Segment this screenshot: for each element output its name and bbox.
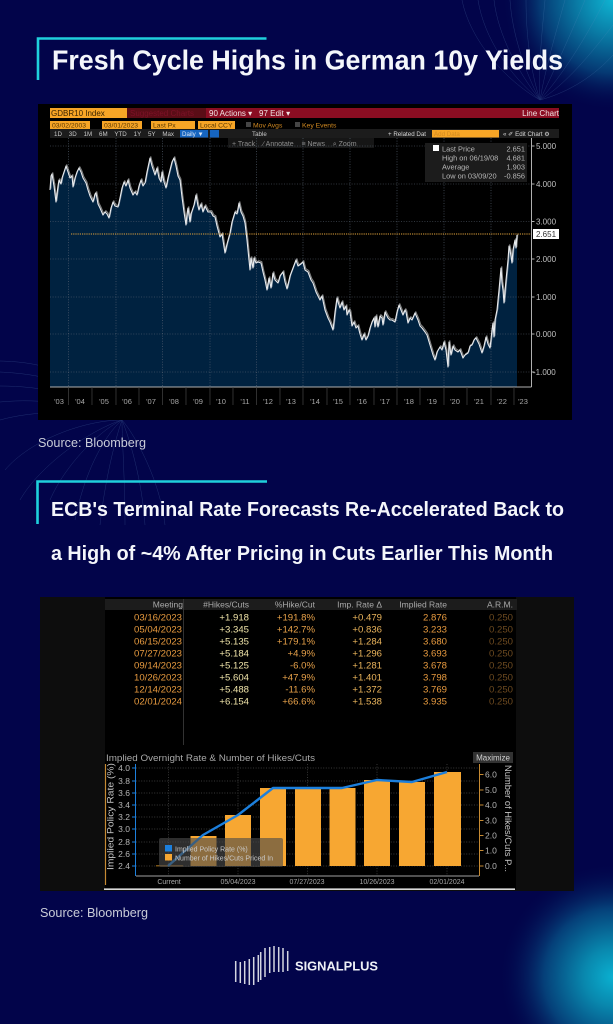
table: implied rates by meeting: 06/15/2023 (134, 636, 182, 648)
table: implied rates by meeting: 0.250 (489, 624, 513, 636)
legend: price statistics: High on 06/19/08 (442, 154, 498, 162)
title: ECB terminal rate: a High of ~4% After Pricing in Cuts Earlier This Month (51, 543, 553, 565)
table: implied rates by meeting: 3.798 (423, 672, 447, 684)
legend: price statistics (425, 143, 527, 182)
toolbar: chart header: Line Chart (522, 109, 560, 118)
legend: price statistics: 2.651 (506, 144, 525, 154)
table: implied rates by meeting: +1.296 (352, 648, 382, 660)
source note 2: Source: Bloomberg (40, 906, 148, 920)
toolbar: chart header: 97 Edit ▾ (259, 109, 290, 118)
table: implied rates by meeting: 3.233 (423, 624, 447, 636)
table: implied rates by meeting: +191.8% (277, 612, 315, 624)
axis: years: '20 (450, 397, 460, 406)
legend: price statistics: 4.681 (506, 154, 525, 162)
table: implied rates by meeting: 0.250 (489, 636, 513, 648)
axis: yield values: 2.651 (536, 230, 557, 239)
axis: number of hikes and cuts: 3.0 (485, 816, 497, 826)
axis: years: '16 (357, 397, 367, 406)
icon: signal wave bars (236, 946, 288, 985)
toolbar: chart header: Table (252, 131, 267, 138)
table: implied rates by meeting: +5.604 (219, 672, 250, 684)
axis: yield values: -1.000 (533, 368, 556, 377)
axis: years: '15 (333, 397, 343, 406)
axis: years: '06 (122, 397, 132, 406)
table: implied rates by meeting: 09/14/2023 (134, 660, 182, 672)
table: implied rates by meeting: +4.9% (288, 648, 315, 660)
axis: years: '05 (99, 397, 109, 406)
axis: years: '03 (54, 397, 64, 406)
table: implied rates by meeting: %Hike/Cut (275, 600, 316, 610)
toolbar: chart header: 03/01/2023 (104, 122, 138, 130)
table: implied rates by meeting: +1.918 (219, 612, 249, 624)
table: implied rates by meeting: -6.0% (290, 660, 315, 672)
legend: price statistics: Average (442, 162, 469, 172)
axis: number of hikes and cuts: 6.0 (485, 770, 497, 780)
toolbar: chart header: 1D 3D 1M 6M YTD 1Y 5Y Max (54, 131, 175, 138)
axis: years: '14 (310, 397, 320, 406)
table: implied rates by meeting: +1.372 (352, 684, 382, 696)
axis: years: '22 (497, 397, 507, 406)
axis: yield values: 1.000 (536, 293, 557, 302)
table: implied rates by meeting: 3.935 (423, 696, 447, 708)
toolbar: chart header: Add Data (434, 131, 460, 138)
table: implied rates by meeting: Meeting (153, 600, 183, 610)
table: implied rates by meeting: 12/14/2023 (134, 684, 182, 696)
table: implied rates by meeting: 02/01/2024 (134, 696, 183, 708)
toolbar: chart header: GDBR10 Index (51, 109, 105, 118)
table: implied rates by meeting: 3.678 (423, 660, 447, 672)
axis: years (54, 387, 528, 406)
logo: SignalPlus: SIGNALPLUS (295, 958, 378, 974)
toolbar: chart header: Mov Avgs (253, 122, 283, 130)
toolbar: chart header: 03/02/2003 (52, 122, 86, 130)
axis: years: '07 (146, 397, 156, 406)
table: implied rates by meeting: +179.1% (277, 636, 315, 648)
toolbar: chart header: + Track ∕ Annotate ≡ News ⌕ Zoom (232, 141, 357, 148)
title: ECB terminal rate: ECB's Terminal Rate Forecasts Re-Accelerated Back to (51, 499, 564, 521)
chart: plot area with yield line (50, 138, 531, 387)
axis: yield values: 3.000 (536, 218, 557, 226)
table: implied rates by meeting: 0.250 (489, 696, 513, 708)
table: implied rates by meeting: +0.836 (352, 624, 382, 636)
table: implied rates by meeting: -11.6% (285, 684, 315, 696)
legend: chart series: Number of Hikes/Cuts Priced In (175, 856, 273, 862)
table: implied rates by meeting: +6.154 (219, 696, 250, 708)
table: implied rates by meeting: #Hikes/Cuts (203, 600, 249, 610)
legend: price statistics: 1.903 (506, 162, 525, 172)
table: implied rates by meeting: +1.401 (352, 672, 382, 684)
axis: number of hikes and cuts: 2.0 (485, 830, 497, 840)
heading: implied overnight rate chart: Implied Overnight Rate & Number of Hikes/Cuts (106, 753, 315, 764)
axis: number of hikes and cuts (480, 764, 513, 876)
axis: years: '04 (75, 397, 85, 406)
table: implied rates by meeting: Implied Rate (399, 600, 447, 610)
table: implied rates by meeting: +5.125 (219, 660, 249, 672)
toolbar: chart header: Local CCY (200, 122, 233, 130)
axis: meeting dates: 07/27/2023 (289, 879, 325, 886)
table: implied rates by meeting: 2.876 (423, 612, 447, 624)
legend: chart series: Implied Policy Rate (%) (175, 846, 248, 854)
axis: meeting dates: Current (157, 879, 181, 886)
axis: years: '23 (518, 397, 528, 406)
axis: implied policy rate: 3.6 (118, 788, 130, 798)
table: implied rates by meeting: +1.284 (352, 636, 383, 648)
table: implied rates by meeting: 0.250 (489, 684, 513, 696)
panel: ECB meeting table and chart (40, 597, 574, 891)
button: Maximize (473, 752, 513, 763)
axis: meeting dates: 02/01/2024 (429, 879, 465, 886)
axis: implied policy rate: 3.8 (118, 776, 130, 786)
table: implied rates by meeting: 10/26/2023 (134, 672, 182, 684)
legend: price statistics: Low on 03/09/20 (442, 172, 497, 180)
table: implied rates by meeting: A.R.M. (487, 600, 513, 610)
table: implied rates by meeting: 05/04/2023 (134, 624, 182, 636)
axis: number of hikes and cuts: 5.0 (485, 785, 497, 795)
axis: years: '18 (404, 397, 414, 406)
table: implied rates by meeting: Imp. Rate Δ (337, 600, 382, 610)
logo: SignalPlus (236, 946, 378, 985)
table: implied rates by meeting: +47.9% (282, 672, 315, 684)
axis: yield values: 5.000 (536, 142, 557, 151)
toolbar: chart header: « ✐ Edit Chart ⚙ (503, 131, 550, 138)
axis: implied policy rate: Implied Policy Rate (%) (106, 763, 116, 870)
toolbar: chart header: Last Px (153, 122, 176, 130)
legend: price statistics: -0.856 (504, 172, 525, 180)
table: implied rates by meeting: 07/27/2023 (134, 648, 182, 660)
legend: price statistics: Last Price (442, 144, 475, 154)
axis: number of hikes and cuts: 4.0 (485, 800, 497, 810)
source note 1: Source: Bloomberg (38, 436, 146, 450)
table: implied rates by meeting: 3.693 (423, 648, 447, 660)
table: implied rates by meeting: 3.680 (423, 636, 447, 648)
table: implied rates by meeting: +1.281 (352, 660, 382, 672)
axis: years: '10 (216, 397, 226, 406)
axis: yield values (50, 138, 559, 387)
axis: years: '08 (169, 397, 179, 406)
axis: implied policy rate: 3.4 (118, 800, 130, 810)
axis: number of hikes and cuts: 0.0 (485, 861, 497, 871)
axis: implied policy rate: 4.0 (118, 763, 130, 773)
axis: years: '13 (286, 397, 296, 406)
axis: yield values: 4.000 (536, 180, 557, 189)
axis: implied policy rate: 2.8 (118, 837, 130, 847)
axis: yield values: 0.000 (536, 330, 557, 339)
axis: implied policy rate: 2.4 (118, 861, 130, 871)
chart: bars and implied policy rate (136, 764, 479, 876)
axis: implied policy rate: 3.0 (118, 824, 130, 834)
axis: years: '21 (474, 397, 484, 406)
table: implied rates by meeting: 0.250 (489, 648, 513, 660)
axis: implied policy rate: 2.6 (118, 849, 130, 859)
table: implied rates by meeting: +66.6% (282, 696, 315, 708)
axis: years: '19 (427, 397, 437, 406)
table: implied rates by meeting: +3.345 (219, 624, 249, 636)
title: Fresh Cycle Highs: Fresh Cycle Highs in German 10y Yields (52, 44, 563, 76)
table: implied rates by meeting: +5.488 (219, 684, 249, 696)
axis: years: '12 (263, 397, 273, 406)
axis: years: '09 (193, 397, 203, 406)
table: implied rates by meeting: +0.479 (352, 612, 382, 624)
toolbar: chart header (50, 108, 560, 148)
axis: years: '17 (380, 397, 390, 406)
table: implied rates by meeting: 03/16/2023 (134, 612, 182, 624)
table: implied rates by meeting: 0.250 (489, 612, 513, 624)
table: implied rates by meeting: 0.250 (489, 660, 513, 672)
axis: meeting dates: 05/04/2023 (220, 879, 256, 886)
axis: meeting dates: 10/26/2023 (359, 879, 395, 886)
table: implied rates by meeting: +1.538 (352, 696, 382, 708)
axis: yield values: 2.000 (536, 255, 557, 264)
table: implied rates by meeting: +142.7% (277, 624, 315, 636)
axis: years: '11 (240, 397, 250, 406)
toolbar: chart header: 90 Actions ▾ (209, 109, 252, 118)
toolbar: chart header: Suggested Charts (130, 109, 194, 118)
axis: implied policy rate (106, 763, 136, 885)
axis: number of hikes and cuts: Number of Hikes/Cuts P... (502, 765, 513, 872)
table: implied rates by meeting: 0.250 (489, 672, 513, 684)
panel: German 10y yield line chart (38, 104, 572, 420)
axis: number of hikes and cuts: 1.0 (485, 846, 497, 856)
table: implied rates by meeting: +5.135 (219, 636, 249, 648)
toolbar: chart header: Daily ▼ (182, 131, 204, 138)
axis: implied policy rate: 3.2 (118, 812, 130, 822)
table: implied rates by meeting (105, 599, 517, 745)
table: implied rates by meeting: +5.184 (219, 648, 250, 660)
table: implied rates by meeting: 3.769 (423, 684, 447, 696)
toolbar: chart header: + Related Dat (388, 131, 426, 138)
legend: chart series (159, 838, 283, 867)
axis: meeting dates (136, 876, 479, 886)
title: ECB terminal rate (38, 482, 564, 565)
button: Maximize: Maximize (476, 754, 510, 762)
toolbar: chart header: Key Events (302, 122, 337, 130)
